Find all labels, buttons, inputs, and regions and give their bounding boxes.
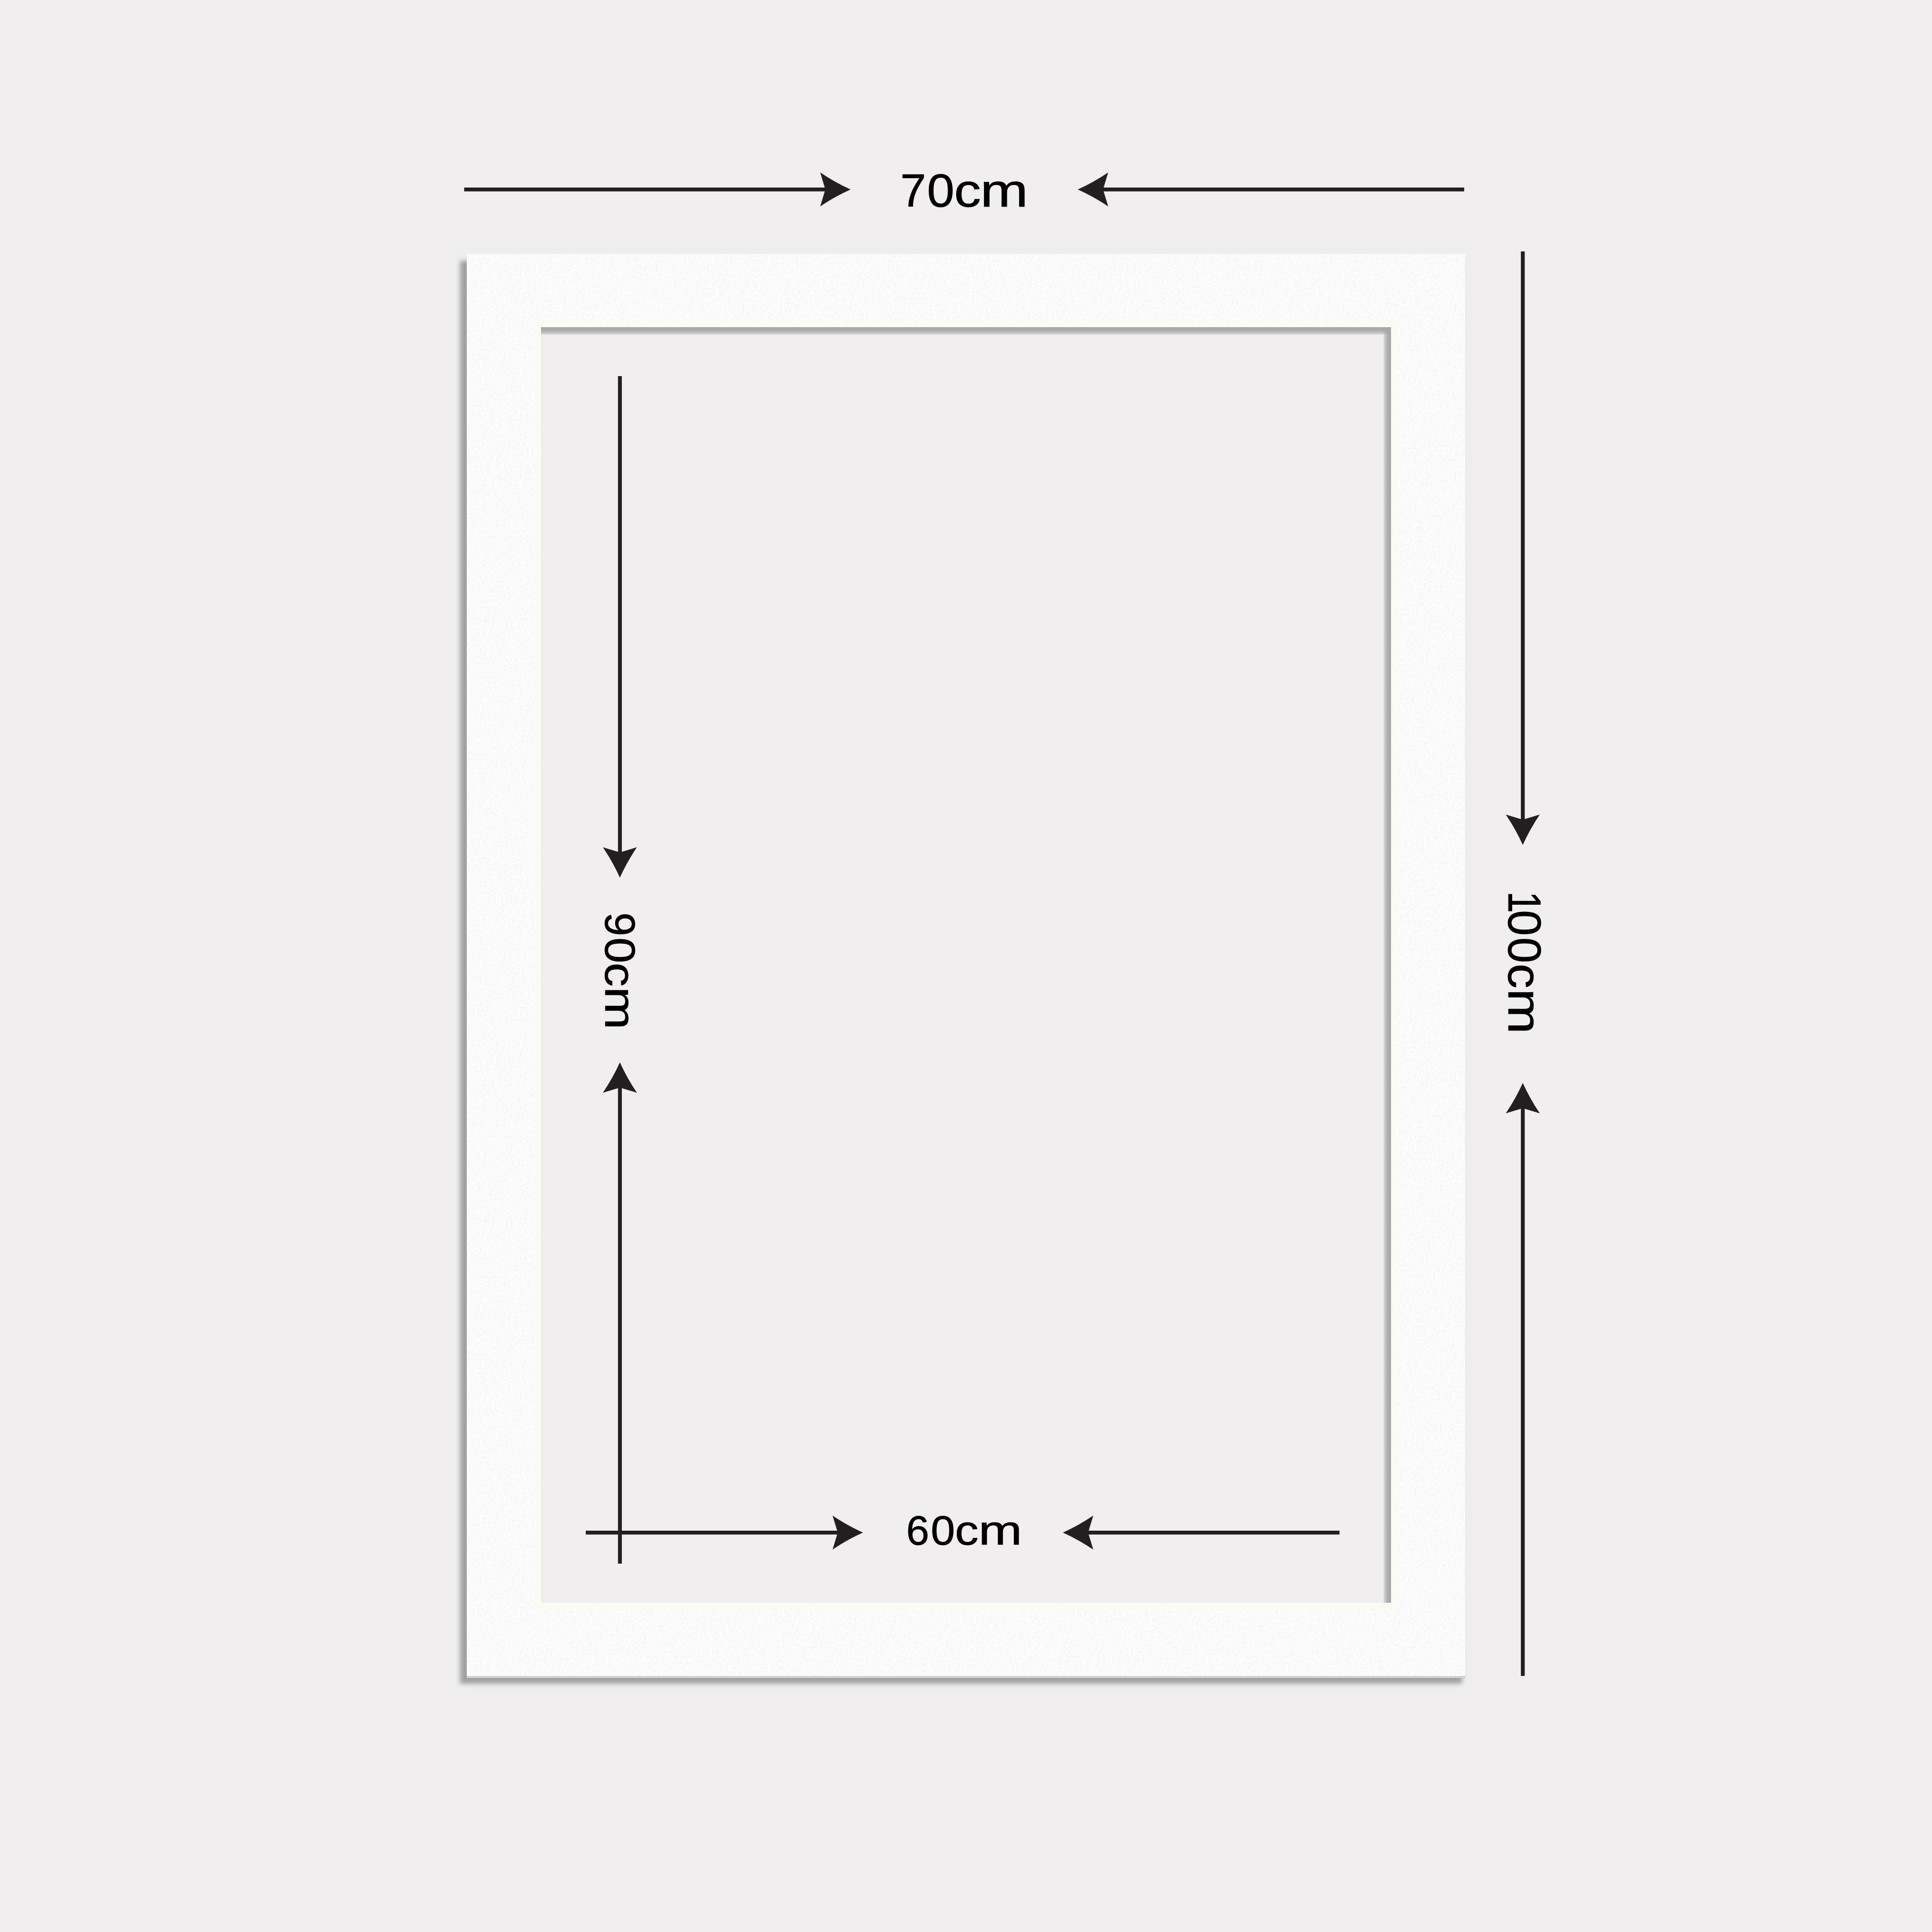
label: 60cm: m [978,1507,1022,1553]
label: 90cm: 0 [596,938,644,963]
mat bottom edge [467,1676,1465,1678]
label: 60cm: 0 [931,1507,955,1553]
dimension: inner width 60cm [586,1507,1340,1553]
arrow: outer height top [1506,251,1540,845]
panel: white mat frame [455,246,1473,1691]
label: 100cm: c [1498,963,1550,988]
label: 70cm: m [980,165,1028,217]
label: 60cm: c [955,1507,978,1553]
frame soft halo [455,246,1473,1691]
arrow: inner height bottom [603,1062,637,1564]
label: 70cm: c [954,165,981,217]
dimension: outer height 100cm [1498,251,1550,1676]
label: 70cm: 0 [927,165,954,217]
arrow: inner width right [1063,1516,1340,1550]
label: 90cm: m [596,987,644,1029]
label: 100cm: 0 [1498,910,1550,936]
opening background [541,327,1391,1603]
label: 60cm: 6 [906,1507,929,1553]
label: 100cm: 0 [1498,937,1550,963]
mat board [467,254,1465,1676]
label: 90cm: c [596,963,644,987]
dimension: outer width 70cm [464,165,1464,217]
arrow: outer height bottom [1506,1083,1540,1676]
label: 90cm: 9 [596,912,644,936]
cream bevel of the opening [535,323,1396,1608]
frame outer shadow [460,261,1462,1684]
arrow: inner width left [586,1516,863,1550]
mat paper texture [467,254,1465,1676]
label: 100cm: 1 [1498,891,1550,913]
label: 70cm: 7 [901,165,926,217]
arrow: outer width left [464,173,851,207]
arrow: inner height top [603,376,637,878]
dimension: inner height 90cm [596,376,644,1564]
inner shadow of the opening [515,309,1408,1628]
label: 100cm: m [1498,989,1550,1034]
arrow: outer width right [1078,173,1464,207]
